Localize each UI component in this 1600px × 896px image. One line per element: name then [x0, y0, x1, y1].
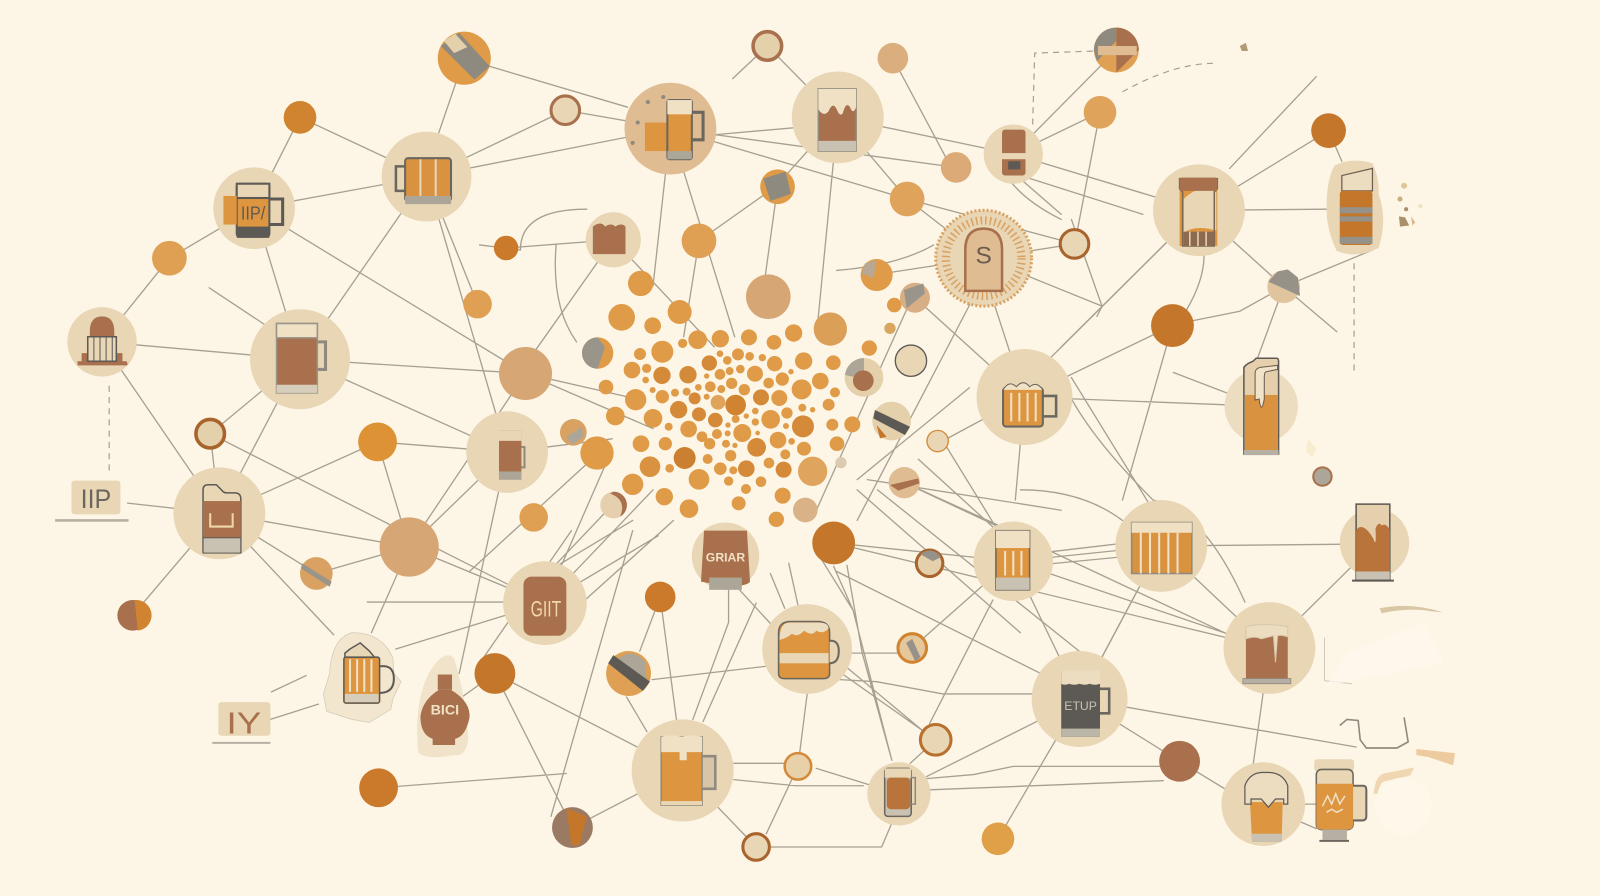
central dot cluster: [560, 259, 948, 563]
icon: left keg node: [173, 467, 265, 559]
icon: right brown glass node: [1223, 602, 1315, 694]
icon: foamy pint node: [1221, 762, 1305, 846]
label: IIP tag: IIP: [81, 484, 111, 514]
icon: small brown mug node: [586, 212, 641, 267]
label: TY tag: [212, 702, 270, 743]
icon: large brown mug node: [250, 309, 350, 409]
icon: wide mug node: [382, 132, 471, 221]
icon: labelled barrel node: GRIAR: [706, 550, 745, 564]
icon: labelled jar node: [503, 561, 587, 645]
icon: small cup node: [984, 125, 1043, 184]
satellite dots: [117, 28, 1346, 860]
icon: dark mug node: IIP/: [241, 202, 266, 223]
icon: labelled barrel node: [692, 522, 759, 590]
dashed connectors: [109, 51, 1354, 475]
network connection lines: [102, 46, 1374, 847]
icon: foamy mug node: [977, 349, 1072, 445]
icon: dark mug labelled node: ETUP: [1064, 699, 1097, 713]
icon: badge with rays: [936, 210, 1032, 306]
icon: tall orange glass node: [1224, 358, 1298, 455]
label: IIP tag: [55, 481, 129, 520]
icon: striped mug blob: [323, 633, 401, 722]
icon: badge with rays: S: [976, 242, 992, 269]
icon: big orange mug node: [632, 719, 734, 821]
icon: patterned mug: [1314, 759, 1366, 841]
icon: mug with foam node: [762, 604, 852, 694]
icon: left cup node: [67, 307, 137, 377]
icon: small bottom mug node: [867, 762, 931, 826]
label: TY tag: IY: [227, 707, 261, 741]
icon: right dark glass node: [1340, 504, 1409, 581]
icon: keg crate node: [1115, 500, 1207, 592]
icon: striped glass node: [973, 521, 1053, 601]
icon: speckled mug node: [624, 83, 716, 175]
decorative worn patches: [1240, 43, 1455, 835]
icon: mid glass node: [466, 411, 548, 493]
icon: labelled bottle: BICI: [431, 702, 459, 718]
icon: tall glass node: [1153, 164, 1245, 256]
icon: dark mug labelled node: [1032, 651, 1128, 747]
icon: dark mug node: [213, 167, 295, 249]
icon: labelled jar node: GIIT: [531, 596, 561, 621]
icon: brown glass node: [792, 71, 884, 163]
icon: labelled bottle: [417, 655, 470, 757]
icon: tall can blob: [1327, 161, 1383, 254]
